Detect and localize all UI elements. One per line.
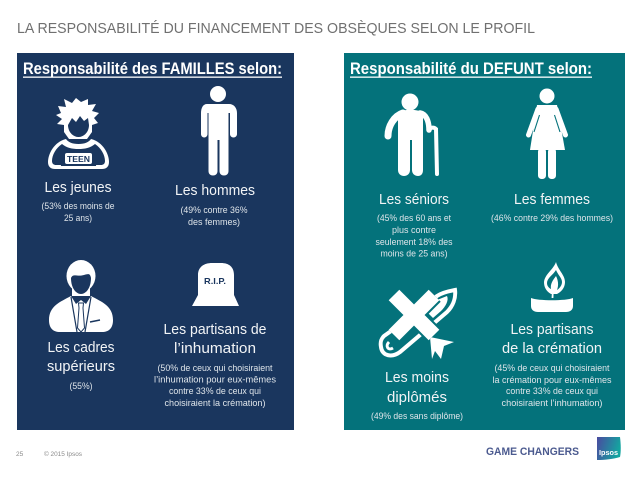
- detail: les partisans de l'inhumation: choisiraient la crémation): [164, 398, 266, 408]
- detail: les jeunes: [42, 201, 114, 223]
- label: les partisans de l'inhumation: Les partisans de: [164, 321, 266, 338]
- icon: teen: TEEN: [67, 154, 90, 164]
- panel heading: défunt: Responsabilité du DEFUNT selon:: [350, 60, 592, 78]
- detail: les jeunes: (53% des moins de: [42, 201, 114, 211]
- footer: page number: 25: [16, 451, 24, 458]
- detail: les partisans de la crémation: contre 33% de ceux qui: [506, 386, 598, 396]
- detail: les hommes: [180, 205, 248, 227]
- detail: les séniors: plus contre: [392, 225, 436, 235]
- panel: responsabilité des familles: [17, 53, 294, 430]
- logo: ipsos: [597, 437, 621, 460]
- icon: man: [201, 86, 237, 176]
- detail: les cadres supérieurs: (55%): [70, 381, 92, 391]
- detail: les jeunes: 25 ans): [64, 213, 92, 223]
- label: les partisans de la crémation: [502, 321, 602, 357]
- detail: les partisans de l'inhumation: (50% de ceux qui choisiraient: [158, 363, 273, 373]
- label: les partisans de l'inhumation: [164, 321, 266, 357]
- detail: les séniors: seulement 18% des: [376, 237, 453, 247]
- label: les hommes: Les hommes: [175, 182, 255, 199]
- detail: les partisans de la crémation: [492, 363, 612, 408]
- label: les moins diplômés: Les moins: [385, 369, 449, 386]
- footer: copyright: © 2015 Ipsos: [44, 450, 83, 458]
- label: les cadres supérieurs: [47, 339, 115, 375]
- detail: les partisans de l'inhumation: l’inhumation pour eux-mêmes: [154, 374, 276, 384]
- icon: senior with cane: [388, 94, 437, 176]
- label: les moins diplômés: diplômés: [387, 389, 447, 406]
- label: les femmes: Les femmes: [514, 191, 590, 208]
- panel: responsabilité du défunt: [344, 53, 625, 430]
- detail: les partisans de la crémation: la crémation pour eux-mêmes: [492, 375, 612, 385]
- detail: les hommes: (49% contre 36%: [180, 205, 248, 215]
- label: les partisans de la crémation: Les partisans: [510, 321, 594, 338]
- detail: les partisans de la crémation: choisiraient l’inhumation): [502, 398, 602, 408]
- detail: les hommes: des femmes): [188, 217, 240, 227]
- label: les cadres supérieurs: supérieurs: [47, 358, 115, 375]
- label: les jeunes: Les jeunes: [44, 179, 112, 196]
- icon: executive: [49, 260, 113, 332]
- label: les séniors: Les séniors: [379, 191, 449, 208]
- detail: les partisans de la crémation: (45% de ceux qui choisiraient: [494, 363, 610, 373]
- label: les partisans de l'inhumation: l’inhumation: [174, 340, 256, 357]
- detail: les séniors: (45% des 60 ans et: [377, 213, 451, 223]
- icon: crossed-out diploma: [381, 290, 455, 359]
- detail: les séniors: [376, 213, 453, 258]
- detail: les séniors: moins de 25 ans): [380, 248, 448, 258]
- logo: ipsos: Ipsos: [599, 450, 618, 457]
- detail: les femmes: (46% contre 29% des hommes): [491, 213, 613, 223]
- detail: les partisans de l'inhumation: contre 33% de ceux qui: [169, 386, 261, 396]
- panel heading: familles: Responsabilité des FAMILLES selon:: [23, 60, 282, 78]
- icon: woman: [528, 88, 566, 179]
- icon: tombstone: [192, 263, 239, 306]
- label: les moins diplômés: [385, 369, 449, 406]
- detail: les moins diplômés: (49% des sans diplôme): [371, 411, 463, 421]
- icon: tombstone: R.I.P.: [204, 276, 226, 286]
- label: les partisans de la crémation: de la crémation: [502, 340, 602, 357]
- icon: candle flame: [531, 262, 573, 312]
- icon: teen: [48, 98, 109, 169]
- detail: les partisans de l'inhumation: [154, 363, 276, 408]
- title: LA RESPONSABILITÉ DU FINANCEMENT DES OBSÈQUES SELON LE PROFIL: [17, 20, 535, 37]
- footer: game changers: GAME CHANGERS: [486, 446, 579, 458]
- label: les cadres supérieurs: Les cadres: [48, 339, 114, 356]
